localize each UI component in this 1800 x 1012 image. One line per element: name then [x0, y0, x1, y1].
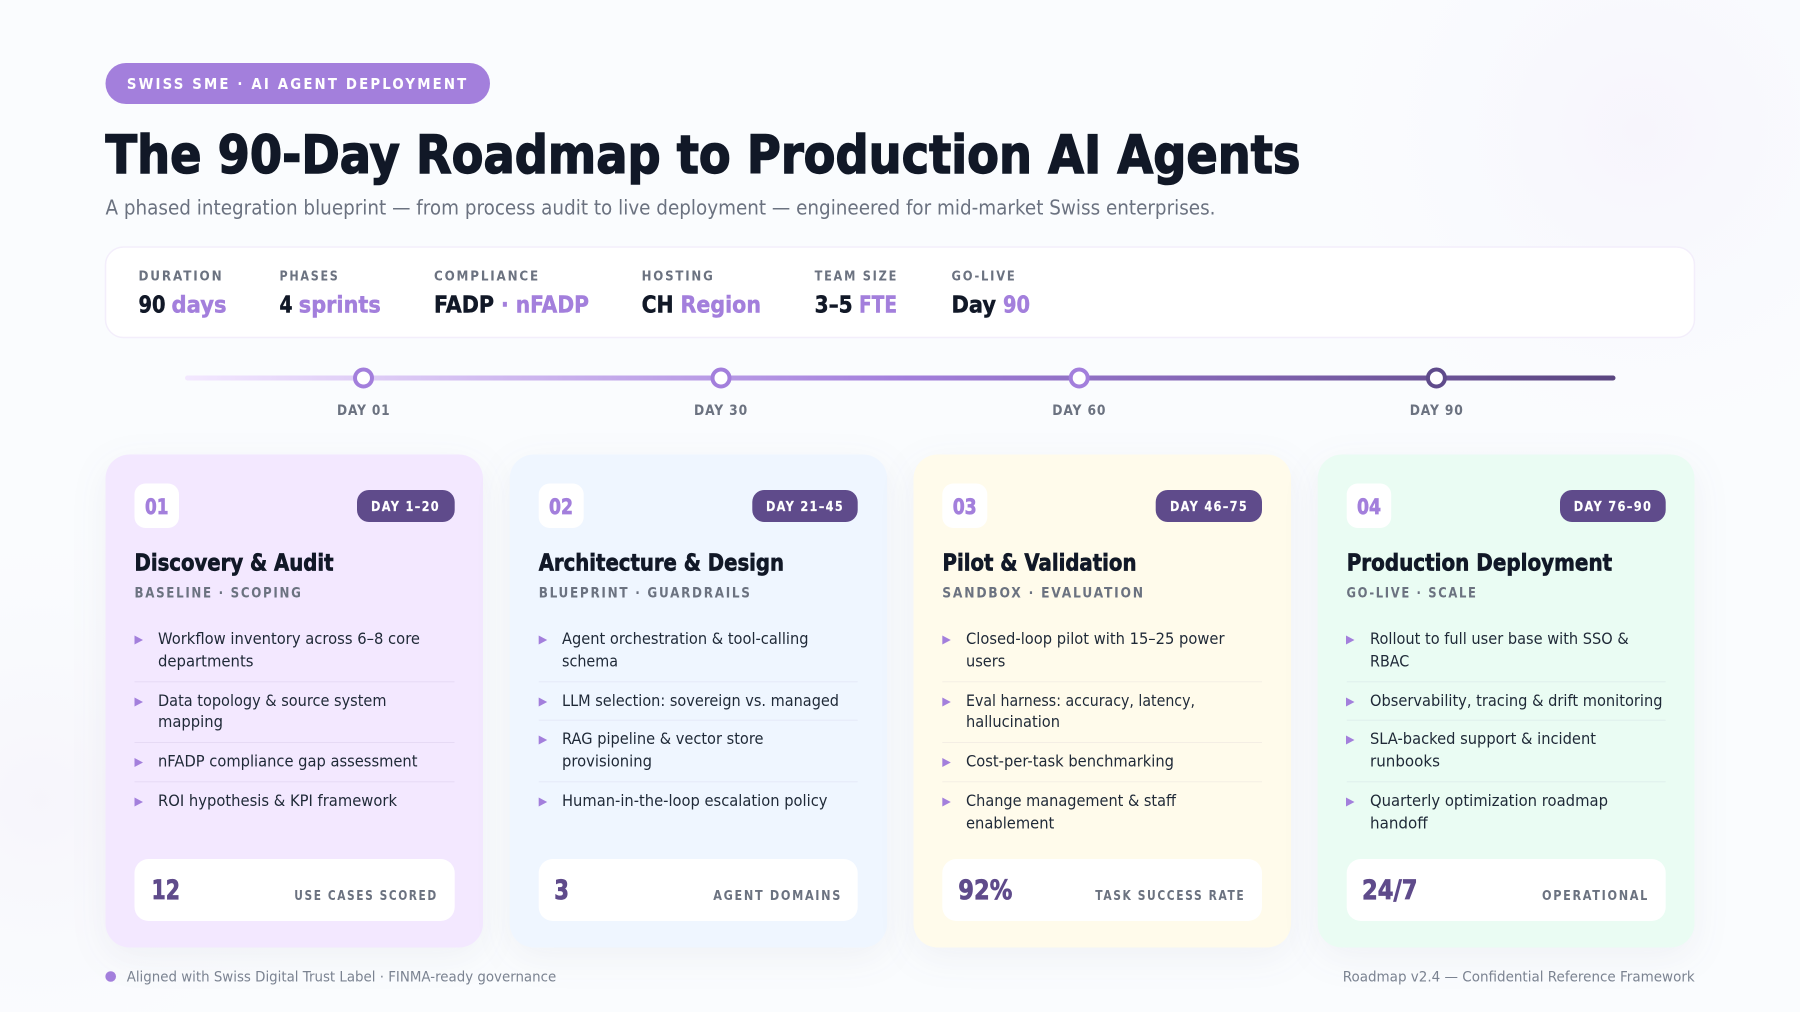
footer note left: Aligned with Swiss Digital Trust Label · FINMA-ready governance: [127, 970, 556, 986]
day range badge: [357, 490, 455, 522]
stat box: 3: [554, 875, 569, 906]
task list: runbooks: [1370, 751, 1440, 770]
stat box: [134, 859, 455, 921]
phase number: 01: [145, 495, 168, 519]
fact: phases: [280, 270, 381, 318]
task list: Human-in-the-loop escalation policy: [562, 791, 828, 810]
fact: phases: sprints: [299, 290, 381, 318]
fact: hosting: [642, 270, 761, 318]
milestone: day 01: [337, 370, 390, 419]
panel: key facts: [106, 247, 1694, 338]
day range badge: [1156, 490, 1262, 522]
task list: ROI hypothesis & KPI framework: [158, 791, 398, 810]
phase title: Discovery & Audit: [134, 548, 334, 576]
fact: go-live: GO-LIVE: [952, 270, 1016, 284]
fact: compliance: · nFADP: [501, 290, 589, 318]
milestone: day 30: [694, 370, 748, 419]
task list: Change management & staff: [966, 791, 1177, 810]
milestone: day 90: [1410, 370, 1464, 419]
fact: team size: TEAM SIZE: [815, 270, 898, 284]
fact: hosting: Region: [680, 290, 761, 318]
task list: RAG pipeline & vector store: [562, 729, 764, 748]
task list: handoff: [1370, 813, 1429, 832]
milestone: day 90: DAY 90: [1410, 403, 1464, 419]
task list: Eval harness: accuracy, latency,: [966, 691, 1195, 710]
task list: [942, 629, 1262, 832]
phase number: [539, 484, 584, 528]
stat box: [942, 859, 1262, 921]
task list: nFADP compliance gap assessment: [158, 751, 418, 770]
task list: LLM selection: sovereign vs. managed: [562, 691, 839, 710]
task list: schema: [562, 651, 618, 670]
fact: go-live: 90: [1003, 290, 1030, 318]
stat box: USE CASES SCORED: [294, 888, 438, 904]
fact: hosting: CH: [642, 290, 674, 318]
task list: departments: [158, 651, 254, 670]
milestone: day 30: DAY 30: [694, 403, 748, 419]
task list: hallucination: [966, 712, 1060, 731]
fact: duration: days: [172, 290, 226, 318]
task list: users: [966, 651, 1005, 670]
day range badge: DAY 76–90: [1574, 500, 1652, 515]
phase subtitle: BLUEPRINT · GUARDRAILS: [539, 586, 752, 602]
fact: hosting: HOSTING: [642, 270, 715, 284]
fact: duration: [138, 270, 226, 318]
task list: enablement: [966, 813, 1054, 832]
fact: team size: [815, 270, 898, 318]
timeline: [185, 370, 1616, 419]
phase number: [1347, 484, 1391, 528]
fact: team size: 3–5: [815, 290, 853, 318]
header pill: SWISS SME · AI AGENT DEPLOYMENT: [127, 75, 468, 93]
fact: duration: 90: [138, 290, 166, 318]
panel: phase 2 architecture and design: [510, 454, 887, 948]
stat box: [539, 859, 858, 921]
task list: Cost-per-task benchmarking: [966, 751, 1174, 770]
day range badge: [1560, 490, 1666, 522]
task list: Agent orchestration & tool-calling: [562, 629, 808, 648]
task list: Data topology & source system: [158, 691, 386, 710]
phase number: [134, 484, 179, 528]
title: The 90-Day Roadmap to Production AI Agents: [106, 125, 1300, 186]
stat box: 92%: [958, 875, 1012, 906]
milestone: day 01: DAY 01: [337, 403, 390, 419]
stat box: TASK SUCCESS RATE: [1095, 888, 1245, 904]
task list: provisioning: [562, 751, 652, 770]
phase number: [942, 484, 987, 528]
fact: go-live: [952, 270, 1030, 318]
stat box: [1347, 859, 1666, 921]
task list: Workflow inventory across 6–8 core: [158, 629, 420, 648]
milestone: day 60: DAY 60: [1052, 403, 1106, 419]
day range badge: [752, 490, 858, 522]
phase number: 04: [1357, 495, 1381, 519]
fact: compliance: COMPLIANCE: [434, 270, 540, 284]
task list: mapping: [158, 712, 223, 731]
task list: [134, 629, 454, 810]
task list: RBAC: [1370, 651, 1409, 670]
day range badge: DAY 21–45: [766, 500, 844, 515]
panel: phase 3 pilot and validation: [914, 454, 1291, 948]
footer note right: Roadmap v2.4 — Confidential Reference Framework: [1343, 970, 1695, 986]
task list: SLA-backed support & incident: [1370, 729, 1596, 748]
phase title: Pilot & Validation: [942, 548, 1136, 576]
day range badge: DAY 1–20: [371, 500, 440, 515]
phase subtitle: SANDBOX · EVALUATION: [942, 586, 1145, 602]
stat box: 24/7: [1362, 875, 1418, 906]
fact: compliance: [434, 270, 589, 318]
task list: Observability, tracing & drift monitoring: [1370, 691, 1662, 710]
fact: go-live: Day: [952, 290, 996, 318]
fact: duration: DURATION: [138, 270, 224, 284]
stat box: OPERATIONAL: [1542, 888, 1649, 904]
stat box: AGENT DOMAINS: [713, 888, 842, 904]
task list: Quarterly optimization roadmap: [1370, 791, 1608, 810]
panel: phase 4 production deployment: [1318, 454, 1694, 948]
task list: Closed-loop pilot with 15–25 power: [966, 629, 1225, 648]
stat box: 12: [152, 875, 180, 906]
milestone: day 60: [1052, 370, 1106, 419]
fact: phases: 4: [280, 290, 292, 318]
phase subtitle: BASELINE · SCOPING: [134, 586, 302, 602]
phase title: Architecture & Design: [539, 548, 784, 576]
task list: Rollout to full user base with SSO &: [1370, 629, 1629, 648]
day range badge: DAY 46–75: [1170, 500, 1248, 515]
phase title: Production Deployment: [1347, 548, 1612, 576]
phase number: 03: [953, 495, 977, 519]
fact: team size: FTE: [859, 290, 897, 318]
fact: phases: PHASES: [280, 270, 340, 284]
phase subtitle: GO-LIVE · SCALE: [1346, 586, 1478, 602]
fact: compliance: FADP: [434, 290, 494, 318]
subtitle: A phased integration blueprint — from process audit to live deployment — engineered for mid-market Swiss enterprises.: [106, 196, 1216, 220]
task list: [539, 629, 858, 810]
task list: [1346, 629, 1666, 832]
panel: phase 1 discovery and audit: [106, 454, 483, 948]
phase number: 02: [549, 495, 573, 519]
header pill: [106, 63, 490, 104]
